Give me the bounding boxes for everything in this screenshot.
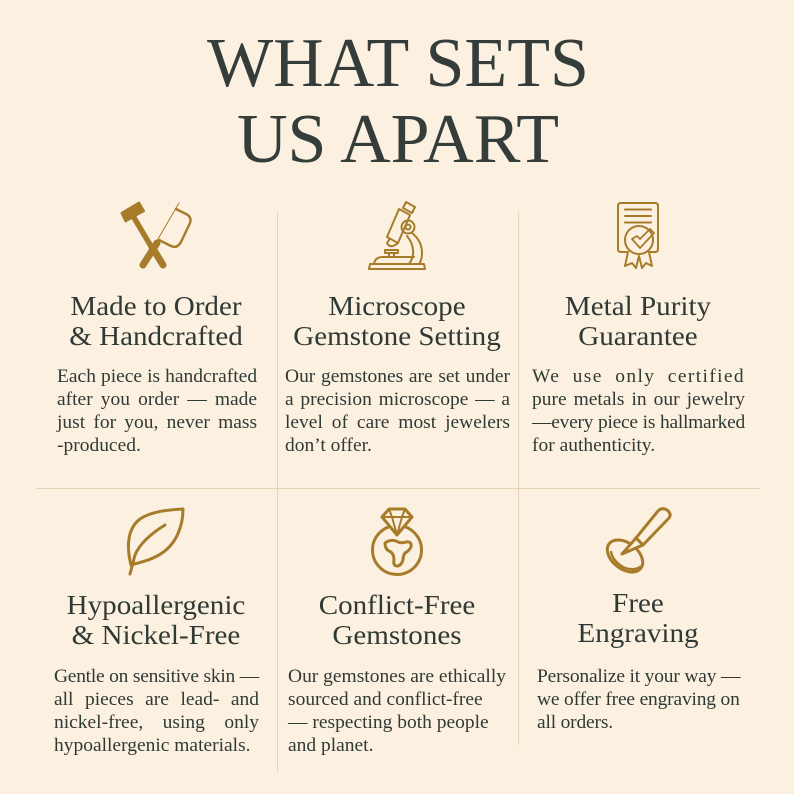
text: metal purity: pure metals in our jewelry [532, 390, 745, 410]
heading: conflict-free: Conflict-Free [319, 590, 475, 620]
text: conflict-free: — respecting both people [288, 713, 489, 733]
text: conflict-free [288, 667, 506, 756]
text: metal purity [532, 367, 745, 456]
heading: free engraving: Free [612, 588, 664, 618]
heading: metal purity [565, 291, 711, 351]
heading: microscope: Microscope [328, 291, 466, 321]
text: free engraving: Personalize it your way — [537, 667, 740, 687]
text: free engraving [537, 667, 741, 733]
title: WHAT SETS [207, 25, 589, 102]
text: free engraving: we offer free engraving on [537, 690, 740, 710]
text: made to order [56, 367, 257, 456]
heading: made to order [69, 291, 243, 351]
text: conflict-free: and planet. [288, 736, 373, 756]
text: hypoallergenic: Gentle on sensitive skin — [54, 667, 259, 687]
text: conflict-free: sourced and conflict-free [288, 690, 483, 710]
text: made to order: -produced. [57, 436, 141, 456]
title [207, 25, 589, 178]
heading: made to order: Made to Order [70, 291, 242, 321]
text: conflict-free: Our gemstones are ethically [288, 667, 506, 687]
text: hypoallergenic: hypoallergenic materials. [54, 736, 251, 756]
heading: hypoallergenic: & Nickel-Free [72, 620, 240, 650]
text: microscope: a precision microscope — a [285, 390, 510, 410]
text: metal purity: We use only certified [532, 367, 745, 387]
text: metal purity: for authenticity. [532, 436, 655, 456]
text: microscope: Our gemstones are set under [285, 367, 510, 387]
heading: hypoallergenic: Hypoallergenic [67, 590, 245, 620]
heading: conflict-free: Gemstones [332, 620, 462, 650]
text: microscope: level of care most jewelers [285, 413, 510, 433]
text: made to order: just for you, never mass [57, 413, 257, 433]
heading: microscope [293, 291, 501, 351]
heading: metal purity: Metal Purity [565, 291, 711, 321]
text: free engraving: all orders. [537, 713, 613, 733]
heading: free engraving: Engraving [577, 618, 699, 648]
text: hypoallergenic: all pieces are lead- and [54, 690, 259, 710]
text: microscope: don’t offer. [285, 436, 372, 456]
heading: hypoallergenic [67, 590, 245, 650]
title: US APART [237, 101, 559, 178]
text: microscope [285, 367, 510, 456]
heading: free engraving [577, 588, 699, 648]
text: hypoallergenic [54, 667, 260, 756]
text: metal purity: —every piece is hallmarked [532, 413, 745, 433]
heading: conflict-free [319, 590, 475, 650]
text: made to order: Each piece is handcrafted [57, 367, 257, 387]
text: hypoallergenic: nickel-free, using only [54, 713, 259, 733]
heading: made to order: & Handcrafted [69, 321, 243, 351]
text: made to order: after you order — made [57, 390, 257, 410]
heading: microscope: Gemstone Setting [293, 321, 501, 351]
heading: metal purity: Guarantee [578, 321, 698, 351]
